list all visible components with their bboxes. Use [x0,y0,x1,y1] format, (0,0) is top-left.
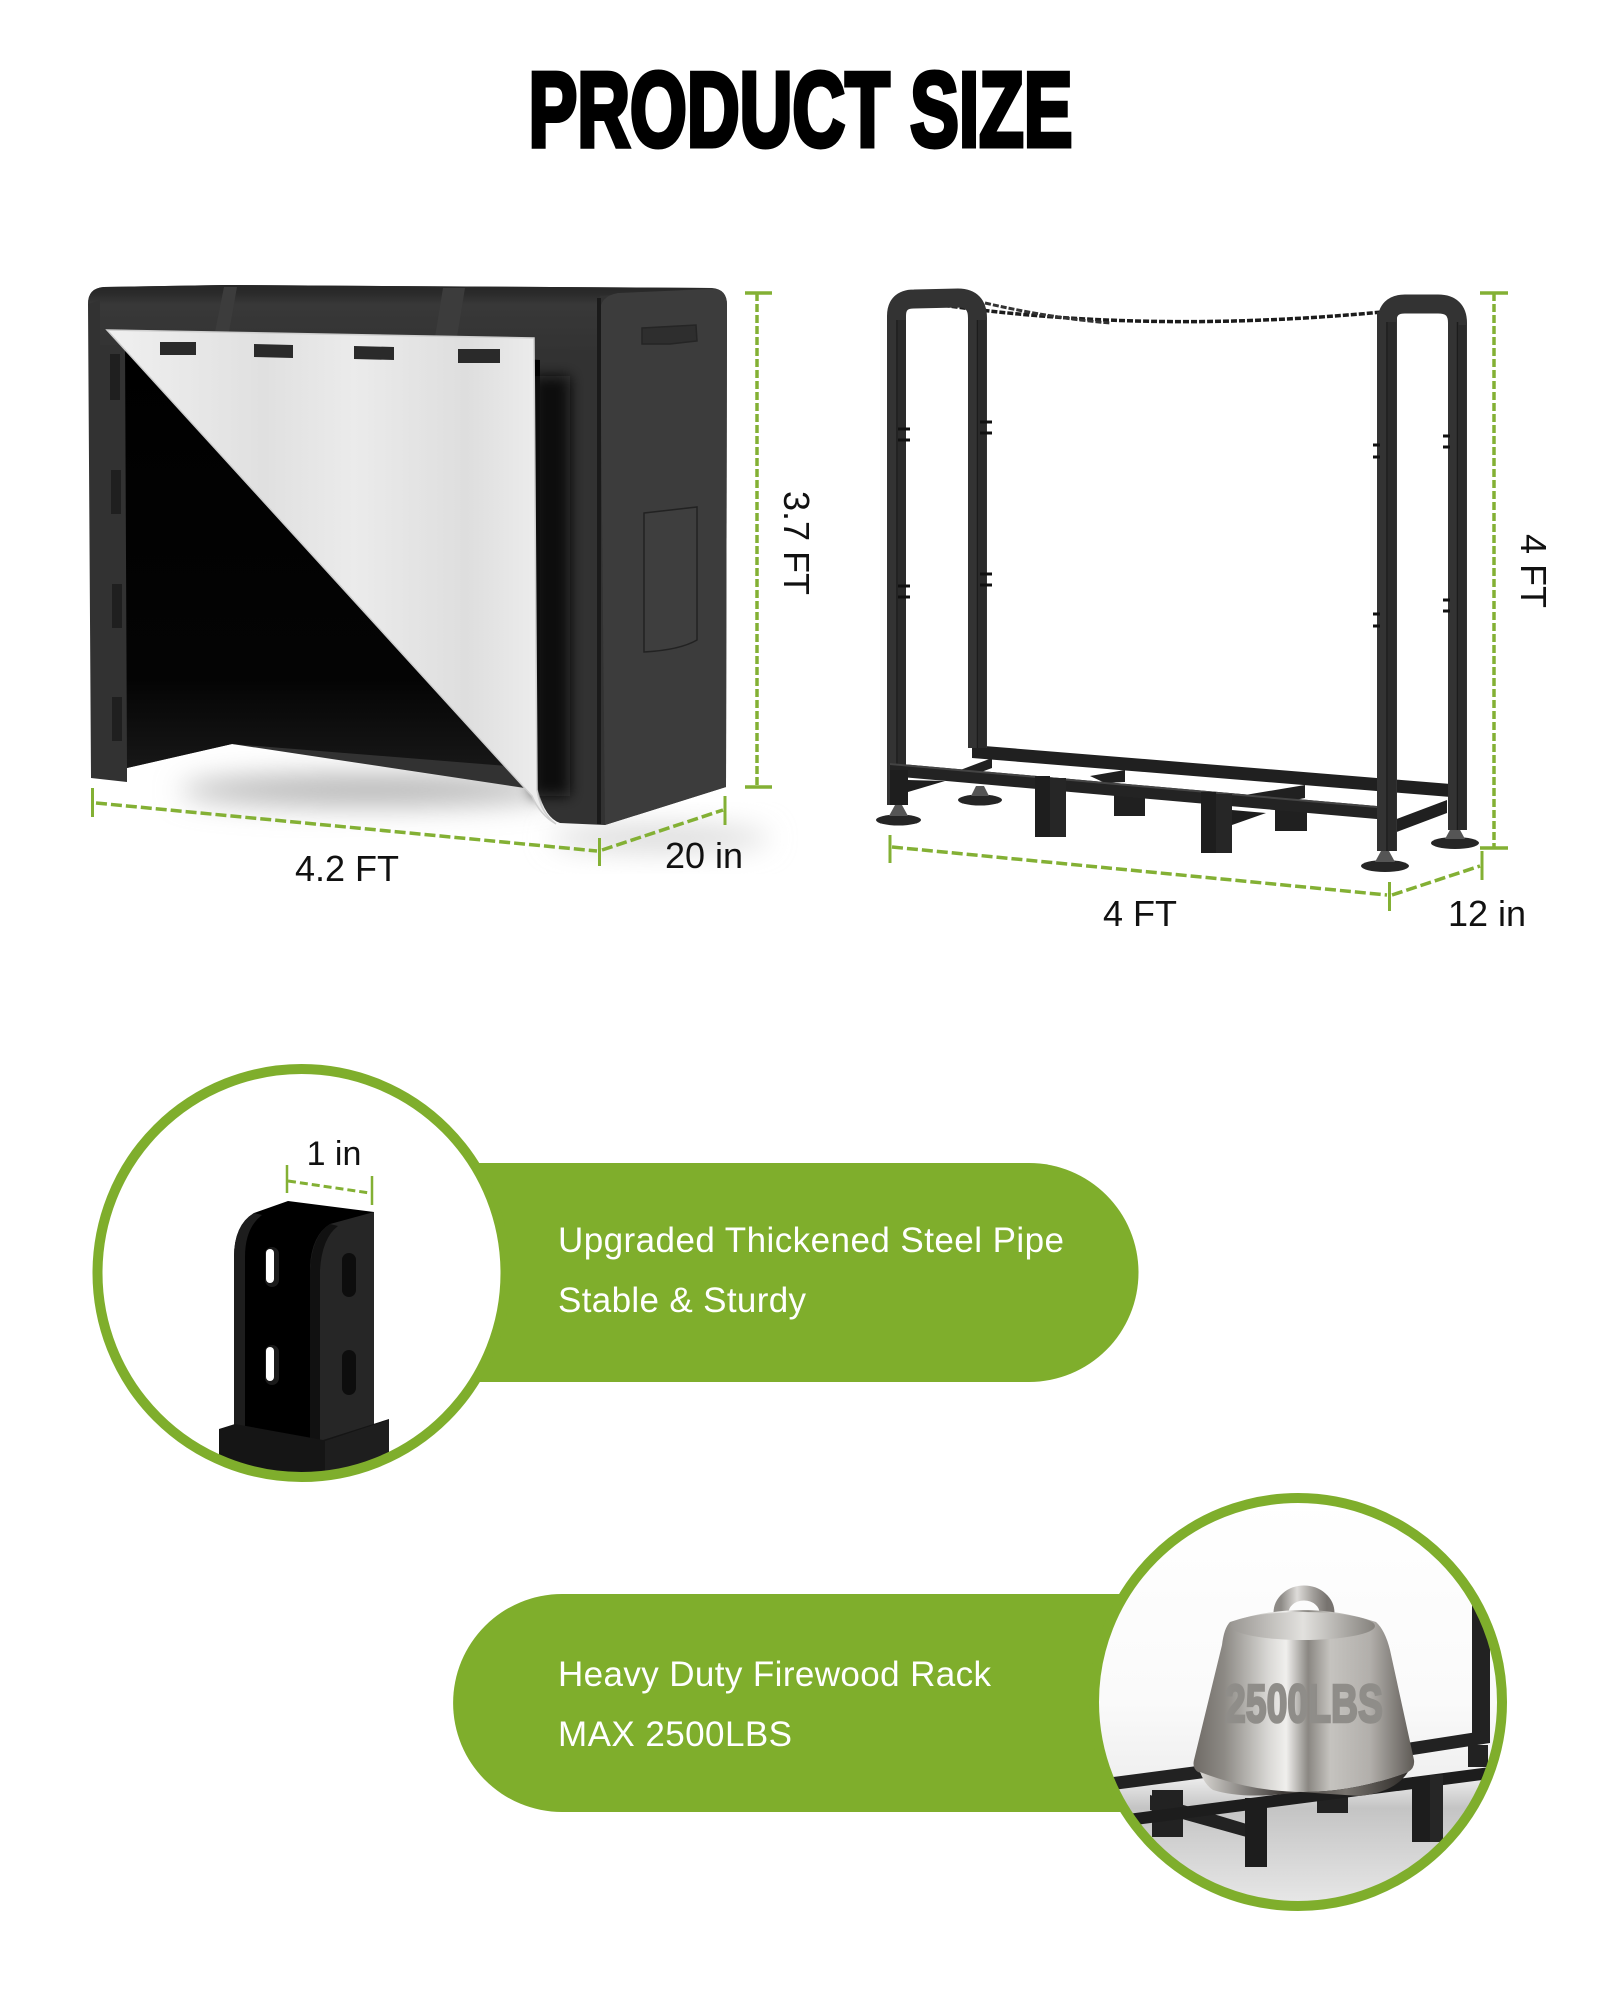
width dimension 4 FT: 4 FT [1103,893,1177,934]
depth dimension 12 in: 12 in [1448,893,1526,934]
cover left velcro strips [110,354,122,741]
rack rear rail, cross braces and rear legs [955,745,1463,833]
cover side handle [642,325,697,344]
rack feet [876,786,1479,872]
weight top [1231,1612,1375,1640]
rack front legs and braces [890,770,1266,853]
flap velcro tabs [160,342,500,363]
circle outline [98,1069,506,1477]
height dimension 3.7 FT: 3.7 FT [776,491,817,595]
rack behind weight [1090,1603,1490,1838]
dimension 1 in [287,1135,372,1205]
cover straps [215,287,465,337]
pill text: Heavy Duty Firewood Rack [558,1655,992,1694]
rack front rail and legs [1120,1767,1490,1867]
rack left arch [896,298,982,805]
depth dimension 20 in [602,796,743,876]
height dimension 3.7 FT [745,293,817,787]
weight label: 2500LBS [1225,1674,1383,1734]
height dimension 4 FT: 4 FT [1513,534,1554,608]
folded white flap [107,330,556,824]
panel: firewood rack cover with dimensions [88,285,817,889]
green pill [440,1163,1138,1382]
width dimension 4 FT [890,835,1390,934]
cover interior [125,345,570,796]
cover ground shadow [180,774,770,850]
panel: heavy duty callout [453,1498,1502,1906]
dimension 1 in: 1 in [307,1135,361,1173]
cover side pocket [644,507,697,652]
circle background [98,1069,506,1477]
circle outline [1094,1498,1502,1906]
depth dimension 20 in: 20 in [665,835,743,876]
bracket slots [265,1247,356,1395]
weight ring [1274,1586,1334,1612]
pill text [558,1655,992,1754]
panel: firewood rack with dimensions [876,293,1554,934]
bracket base [219,1419,389,1472]
cover body [88,285,727,825]
weight base rim [1200,1772,1408,1796]
width dimension 4.2 FT [92,788,600,889]
title: PRODUCT SIZE [528,51,1072,169]
rack right arch [1387,304,1462,830]
rack bolts [898,422,1450,626]
green pill [453,1594,1240,1812]
pill text: Upgraded Thickened Steel Pipe [558,1221,1064,1260]
height dimension 4 FT [1480,293,1554,848]
pill text: MAX 2500LBS [558,1715,792,1754]
width dimension 4.2 FT: 4.2 FT [295,848,399,889]
rack front rail [890,763,1388,820]
pill text [558,1221,1064,1320]
weight body [1194,1610,1414,1792]
circle background [1094,1498,1502,1906]
pill text: Stable & Sturdy [558,1281,806,1320]
steel bracket [219,1201,389,1490]
panel: steel pipe callout [98,1069,1138,1490]
depth dimension 12 in [1392,851,1526,934]
rack right front post [1387,312,1392,851]
rack chain [928,303,1382,323]
